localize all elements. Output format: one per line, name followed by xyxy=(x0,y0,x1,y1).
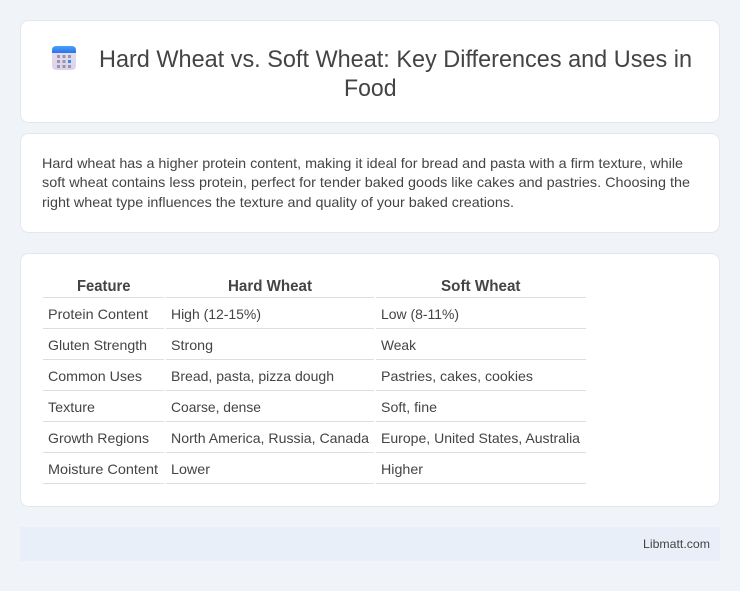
row: common uses xyxy=(48,368,533,384)
table header row: Hard Wheat xyxy=(228,278,313,295)
row: growth regions xyxy=(48,430,580,446)
text block: introduction xyxy=(42,155,690,210)
row: growth regions: Europe, United States, Australia xyxy=(381,430,580,446)
row: gluten strength xyxy=(48,337,417,353)
footer credit: Libmatt.com xyxy=(643,537,710,551)
row: moisture content: Lower xyxy=(171,461,210,477)
row: gluten strength: Weak xyxy=(381,337,417,353)
row: common uses: Bread, pasta, pizza dough xyxy=(171,368,334,384)
row: gluten strength: Strong xyxy=(171,337,213,353)
footer bar xyxy=(20,527,720,561)
row: moisture content: Higher xyxy=(381,461,423,477)
text block: introduction: soft wheat contains less protein, perfect for tender baked goods like cakes and pastries. Choosing the xyxy=(42,174,690,190)
row: texture: Soft, fine xyxy=(381,399,437,415)
row: common uses: Common Uses xyxy=(48,368,142,384)
row: protein content xyxy=(48,306,459,322)
table header row: Feature xyxy=(77,278,131,295)
row: texture xyxy=(48,399,437,415)
row: moisture content: Moisture Content xyxy=(48,461,158,477)
row: growth regions: Growth Regions xyxy=(48,430,149,446)
table header row: Soft Wheat xyxy=(441,278,521,295)
panel: introduction xyxy=(20,134,720,232)
table header row xyxy=(77,278,521,295)
row: texture: Texture xyxy=(48,399,95,415)
panel: title header xyxy=(20,20,720,122)
row: gluten strength: Gluten Strength xyxy=(48,337,147,353)
icon: calendar xyxy=(52,46,76,70)
row: growth regions: North America, Russia, Canada xyxy=(171,430,369,446)
title: Food xyxy=(344,75,396,102)
text block: introduction: right wheat type influences the texture and quality of your baked creations. xyxy=(42,194,514,210)
text block: introduction: Hard wheat has a higher protein content, making it ideal for bread and pasta with a firm texture, while xyxy=(42,155,683,171)
row: common uses: Pastries, cakes, cookies xyxy=(381,368,533,384)
title: Hard Wheat vs. Soft Wheat: Key Differences and Uses in xyxy=(99,46,692,73)
title xyxy=(99,46,692,102)
row: protein content: Protein Content xyxy=(48,306,148,322)
row: texture: Coarse, dense xyxy=(171,399,261,415)
panel: comparison table xyxy=(20,254,720,506)
row: protein content: Low (8-11%) xyxy=(381,306,459,322)
row: protein content: High (12-15%) xyxy=(171,306,261,322)
row: moisture content xyxy=(48,461,423,477)
